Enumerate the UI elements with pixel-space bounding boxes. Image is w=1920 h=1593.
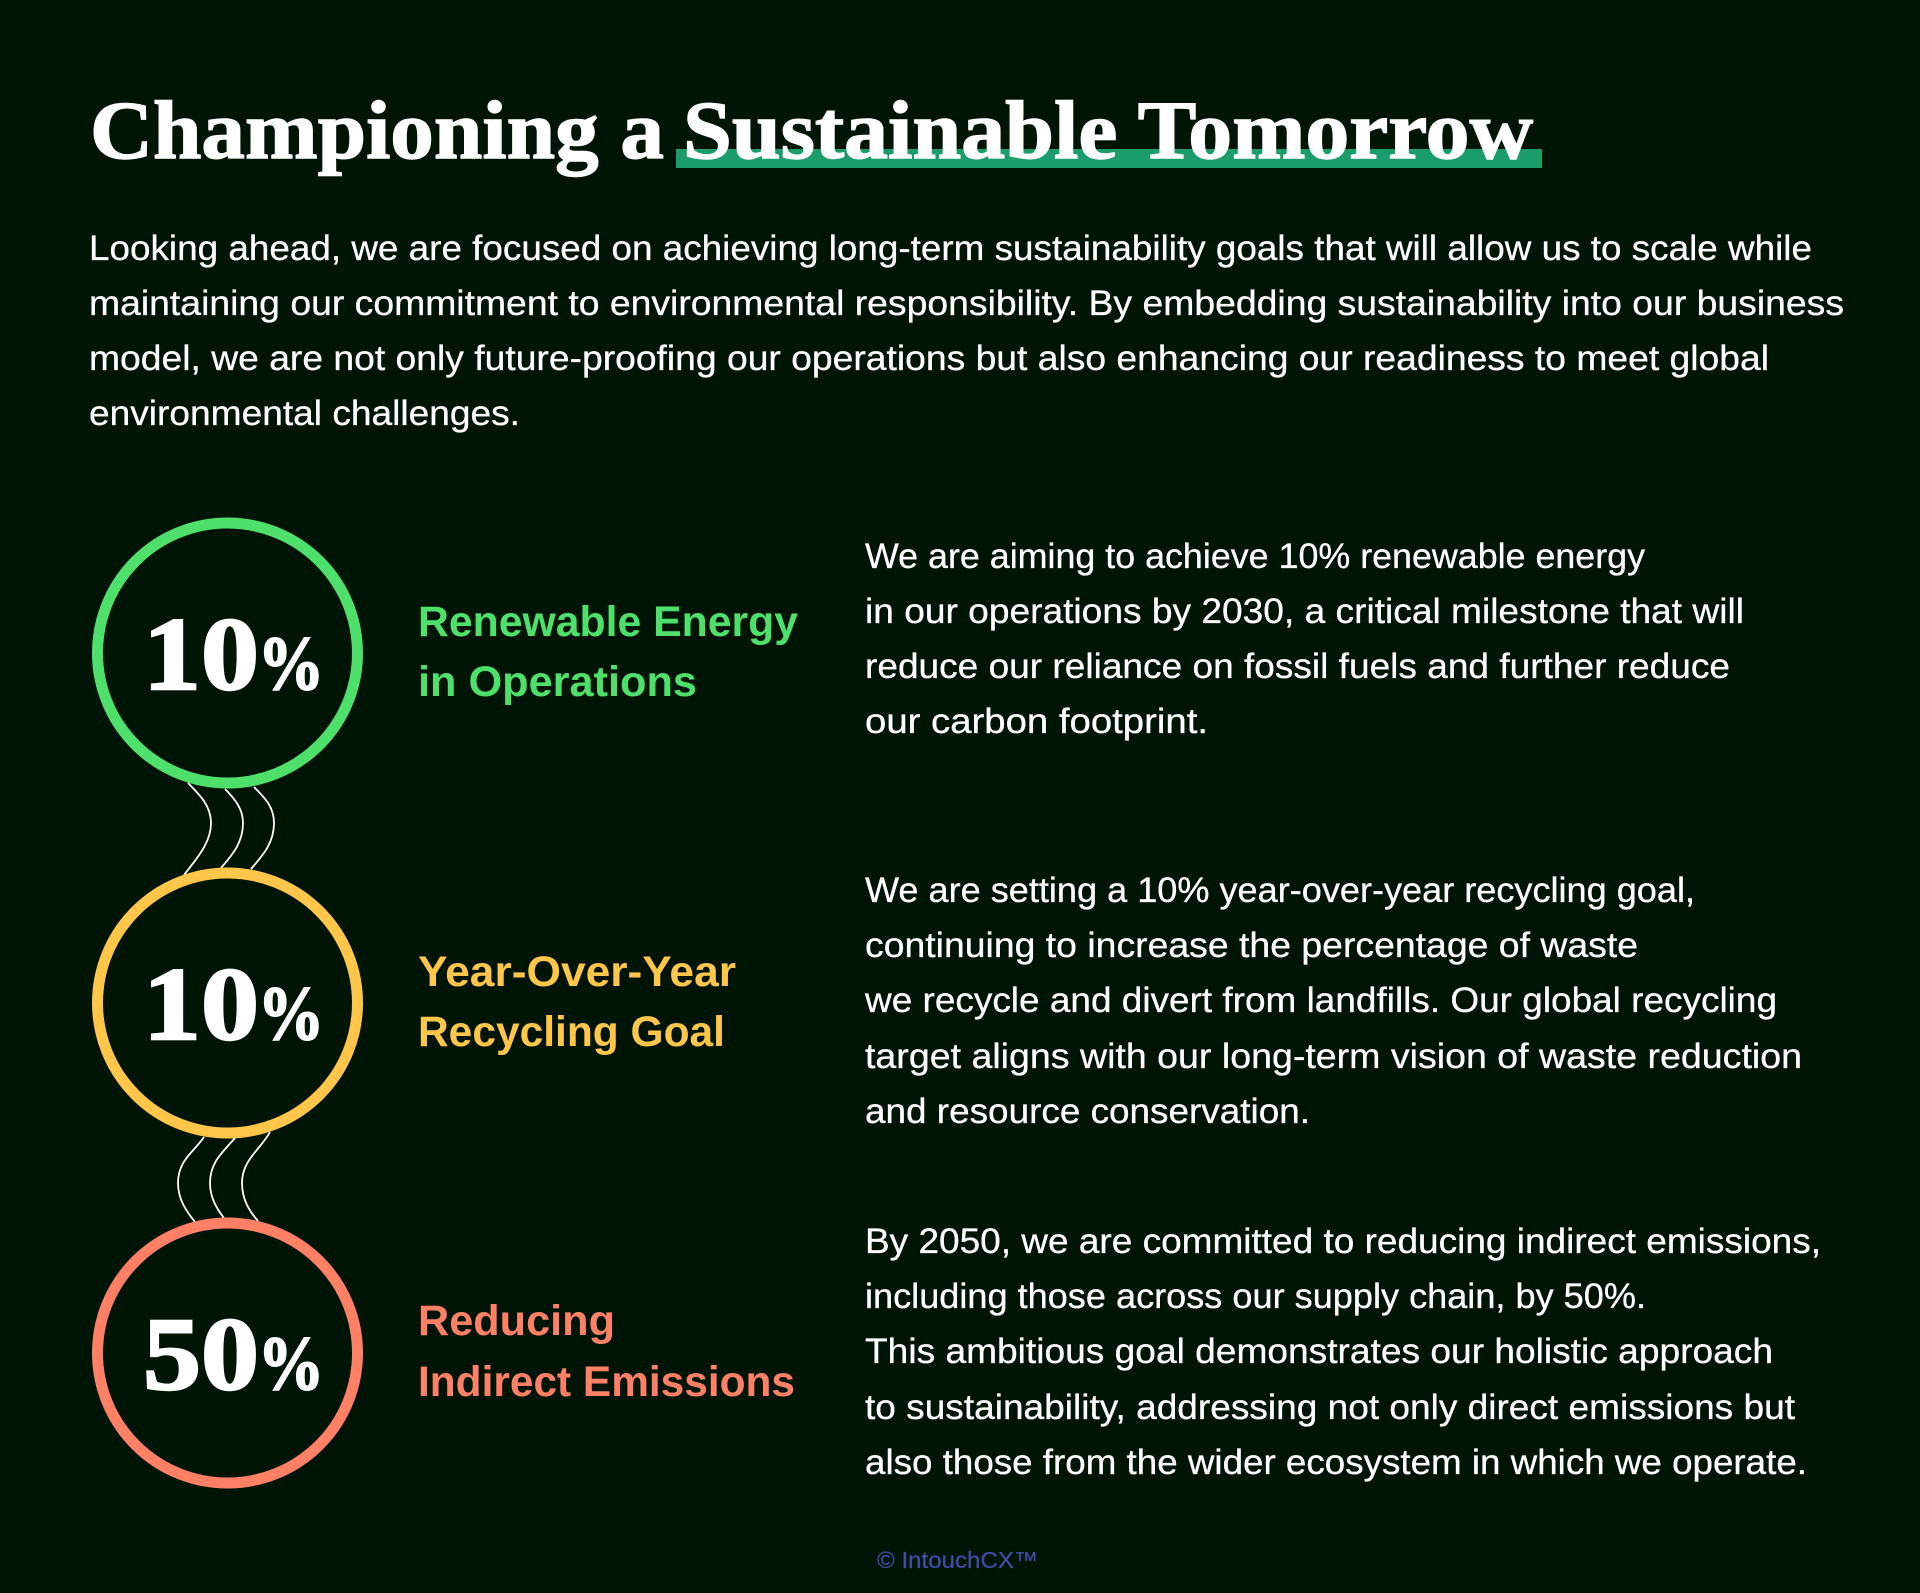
goal 2: description: target aligns with our long-term vision of waste reduction: [865, 1036, 1802, 1076]
connector: waves between second and third circle: [178, 1132, 270, 1222]
goal 3: label: Reducing: [418, 1297, 615, 1345]
goal 3: label: [418, 1297, 795, 1406]
goal 3: description: to sustainability, addressing not only direct emissions but: [865, 1387, 1795, 1427]
intro paragraph: maintaining our commitment to environmental responsibility. By embedding sustainability into our business: [89, 283, 1844, 323]
intro paragraph: model, we are not only future-proofing our operations but also enhancing our readiness to meet global: [89, 338, 1769, 378]
goal 1: description: We are aiming to achieve 10% renewable energy: [865, 536, 1645, 576]
goal 3: description: This ambitious goal demonstrates our holistic approach: [865, 1331, 1773, 1371]
goal 3: circle: [98, 1223, 358, 1483]
goal 2: label: Year-Over-Year: [418, 948, 736, 996]
title: Championing a: [90, 84, 664, 176]
goal 1: description: our carbon footprint.: [865, 701, 1208, 741]
intro paragraph: [89, 228, 1844, 433]
goal 2: label: Recycling Goal: [418, 1008, 725, 1056]
goal 1: description: reduce our reliance on fossil fuels and further reduce: [865, 646, 1730, 686]
goal 2: description: continuing to increase the percentage of waste: [865, 925, 1638, 965]
goal 2: description: [864, 870, 1802, 1131]
goal 3: description: By 2050, we are committed to reducing indirect emissions,: [865, 1221, 1821, 1261]
goal 2: circle: [98, 873, 358, 1133]
goal 1: description: in our operations by 2030, a critical milestone that will: [865, 591, 1744, 631]
goal 1: label: [418, 598, 798, 706]
goal 2: circle: 10: [143, 947, 259, 1062]
goal 3: label: Indirect Emissions: [418, 1358, 795, 1406]
title: Sustainable Tomorrow: [683, 84, 1533, 176]
goal 2: label: [418, 948, 736, 1056]
goal 3: description: [865, 1221, 1821, 1482]
goal 3: description: also those from the wider ecosystem in which we operate.: [865, 1442, 1807, 1482]
goal 1: label: in Operations: [418, 658, 697, 706]
footer credit: © IntouchCX™: [877, 1547, 1038, 1573]
goal 1: circle: 10: [143, 597, 259, 712]
goal 1: description: [865, 536, 1744, 741]
title: [90, 84, 1542, 176]
goal 3: description: including those across our supply chain, by 50%.: [865, 1276, 1646, 1316]
goal 2: description: We are setting a 10% year-over-year recycling goal,: [865, 870, 1695, 910]
connector: waves between first and second circle: [184, 783, 274, 875]
goal 1: label: Renewable Energy: [418, 598, 798, 646]
goal 3: circle: 50: [143, 1297, 259, 1412]
goal 1: circle: %: [258, 622, 324, 706]
goal 3: circle: %: [258, 1322, 324, 1406]
goal 2: description: and resource conservation.: [865, 1091, 1310, 1131]
title highlight bar: [676, 149, 1542, 168]
intro paragraph: Looking ahead, we are focused on achieving long-term sustainability goals that will allow us to scale while: [89, 228, 1812, 268]
intro paragraph: environmental challenges.: [89, 393, 520, 433]
goal 1: circle: [98, 523, 358, 783]
goal 2: description: we recycle and divert from landfills. Our global recycling: [864, 980, 1777, 1020]
goal 2: circle: %: [258, 972, 324, 1056]
